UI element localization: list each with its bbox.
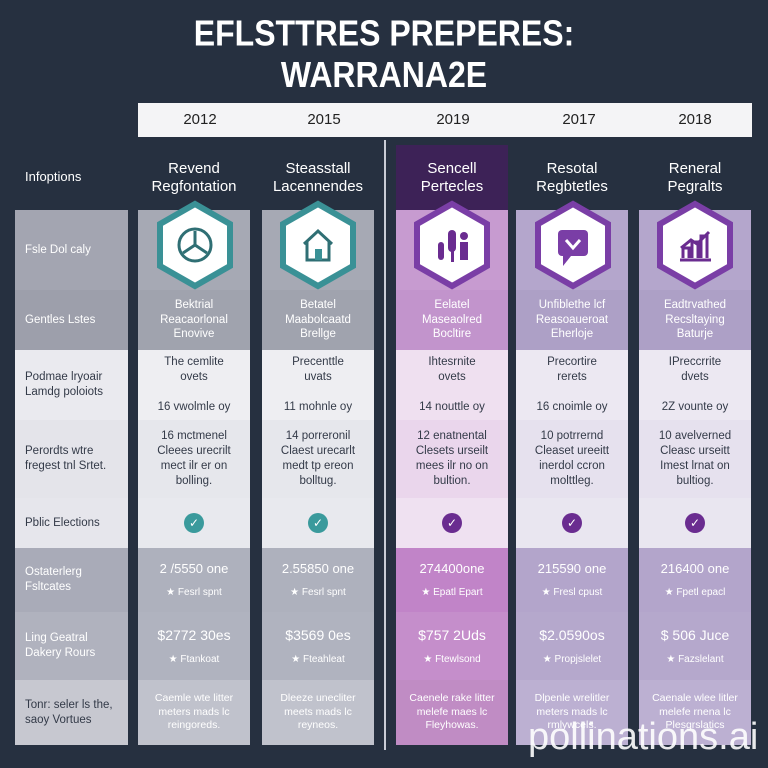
column 2: Steasstall <box>285 160 351 177</box>
column: labels: Tonr: seler ls the, <box>25 699 113 711</box>
column: labels: Fsle Dol caly <box>25 244 91 256</box>
column 2: Dleeze unecliter <box>280 692 356 704</box>
column 5: ✓ <box>690 516 700 530</box>
year header bar: 2015 <box>307 111 341 128</box>
column 2: $3569 0es <box>285 627 351 643</box>
column 1: Regfontation <box>151 178 237 194</box>
column 2: Lacennendes <box>273 178 363 194</box>
column: labels: Podmae lryoair <box>25 371 102 383</box>
column 2: 2.55850 one <box>282 561 354 576</box>
column 3 (highlighted): Pertecles <box>421 178 483 194</box>
column 4: 10 potrrernd <box>541 430 603 442</box>
column 1: Reacaorlonal <box>160 314 228 326</box>
icon: chat hexagon <box>535 200 611 290</box>
column 5: Plesgrslatics <box>666 719 724 731</box>
column 1: Enovive <box>174 328 214 340</box>
column 1: ✓ <box>189 516 199 530</box>
column 3 (highlighted): Fleyhowas. <box>425 719 479 731</box>
column: labels <box>15 169 128 745</box>
column 5 <box>639 160 751 745</box>
column 4: Eherloje <box>551 328 593 340</box>
column 1: ovets <box>180 371 208 383</box>
column: labels: Ling Geatral <box>25 632 88 644</box>
watermark: pollinations.ai <box>528 716 758 758</box>
column 1: 2 /5550 one <box>160 561 228 576</box>
year header bar: 2019 <box>436 111 470 128</box>
column 2: Maabolcaatd <box>285 314 351 326</box>
icon: chart hexagon <box>657 200 733 290</box>
column 3 (highlighted): Bocltire <box>433 328 471 340</box>
column 3 (highlighted): Eelatel <box>434 299 470 311</box>
column 2: uvats <box>304 371 332 383</box>
column 4: ★ Propjslelet <box>543 654 601 665</box>
column 5: Reneral <box>669 160 721 177</box>
column: labels: Dakery Rours <box>25 647 95 659</box>
icon: people hexagon <box>414 200 490 290</box>
column 5: Eadtrvathed <box>664 299 726 311</box>
column: labels: Gentles Lstes <box>25 314 95 326</box>
column 5: ★ Fpetl epacl <box>665 587 725 598</box>
column 4: meters mads lc <box>536 706 608 718</box>
column: labels: Perordts wtre <box>25 445 93 457</box>
column 2: Precenttle <box>292 356 344 368</box>
column 2: reyneos. <box>298 719 338 731</box>
column 1: reingoreds. <box>168 719 220 731</box>
column 4: Resotal <box>547 160 597 177</box>
column 1 <box>138 160 250 745</box>
column 1: Cleees urecrilt <box>157 445 231 457</box>
year header bar: 2017 <box>562 111 596 128</box>
year header bar: 2018 <box>678 111 712 128</box>
column 2: bolltug. <box>299 475 337 487</box>
column 1: 16 mctmenel <box>161 430 227 442</box>
column 3 (highlighted): bultion. <box>433 475 471 487</box>
column 1: $2772 30es <box>157 627 231 643</box>
column 4: ✓ <box>567 516 577 530</box>
column 4: Reasoaueroat <box>536 314 608 326</box>
column 5: ★ Fazslelant <box>666 654 724 665</box>
column 2: 11 mohnle oy <box>284 401 352 413</box>
column 3 (highlighted): ✓ <box>447 516 457 530</box>
column 2: 14 porreronil <box>286 430 350 442</box>
column 4 <box>516 160 628 745</box>
column 3 (highlighted): $757 2Uds <box>418 627 486 643</box>
column 4: Unfiblethe lcf <box>539 299 605 311</box>
column 4: Dlpenle wrelitler <box>535 692 609 704</box>
column 4: Precortire <box>547 356 597 368</box>
title <box>194 13 574 95</box>
column 5: Caenale wlee litler <box>652 692 738 704</box>
column 5: Recsltaying <box>665 314 725 326</box>
column: labels: Lamdg poloiots <box>25 386 103 398</box>
column 5: 216400 one <box>661 561 729 576</box>
column 1: Bektrial <box>175 299 213 311</box>
column 5: Imest lrnat on <box>660 460 730 472</box>
column 1: 16 vwolmle oy <box>158 401 230 413</box>
column 1: ★ Ftankoat <box>169 654 219 665</box>
column 3 (highlighted): Caenele rake litter <box>409 692 495 704</box>
column 3 (highlighted): mees ilr no on <box>416 460 488 472</box>
column 3 (highlighted): melefe maes lc <box>417 706 487 718</box>
column 2: Claest urecarlt <box>281 445 355 457</box>
column 3 (highlighted): ★ Ftewlsond <box>423 654 481 665</box>
icon: house hexagon <box>280 200 356 290</box>
column 1: ★ Fesrl spnt <box>166 587 222 598</box>
column 5: Pegralts <box>667 178 723 194</box>
column 3 (highlighted): Ihtesrnite <box>428 356 476 368</box>
column 5: $ 506 Juce <box>661 627 729 643</box>
column: labels: saoy Vortues <box>25 714 91 726</box>
column 3 (highlighted): ovets <box>438 371 466 383</box>
column 5: 2Z vounte oy <box>662 401 728 413</box>
column 4: Cleaset ureeitt <box>535 445 609 457</box>
column 5: dvets <box>681 371 709 383</box>
column 4: molttleg. <box>550 475 594 487</box>
column 5: bultiog. <box>676 475 714 487</box>
column: labels: Fsltcates <box>25 581 71 593</box>
column 3 (highlighted): Sencell <box>427 160 477 177</box>
column 1: The cemlite <box>164 356 224 368</box>
column 5: Baturje <box>677 328 713 340</box>
column 4: Regbtetles <box>536 178 608 194</box>
column 1: Revend <box>168 160 220 177</box>
column 4: rerets <box>557 371 587 383</box>
column: labels: fregest tnl Srtet. <box>25 460 106 472</box>
column 2: medt tp ereon <box>282 460 353 472</box>
column 2: Betatel <box>300 299 336 311</box>
column 4: 215590 one <box>538 561 606 576</box>
title: EFLSTTRES PREPERES: <box>194 13 574 53</box>
year header bar <box>138 103 752 137</box>
column 1: bolling. <box>176 475 212 487</box>
column 4: rmlywcels. <box>547 719 596 731</box>
title: WARRANA2E <box>281 54 487 95</box>
column 5: 10 avelverned <box>659 430 731 442</box>
year header bar: 2012 <box>183 111 217 128</box>
column 5: Cleasc urseitt <box>660 445 730 457</box>
icon: clock hexagon <box>157 200 233 290</box>
column: labels: Pblic Elections <box>25 517 100 529</box>
column 3 (highlighted): Clesets urseilt <box>416 445 488 457</box>
column 2: meets mads lc <box>284 706 352 718</box>
column 4: 16 cnoimle oy <box>537 401 607 413</box>
column 1: mect ilr er on <box>161 460 227 472</box>
column 3 (highlighted): Maseaolred <box>422 314 482 326</box>
column 2: ★ Fesrl spnt <box>290 587 346 598</box>
column 2: ✓ <box>313 516 323 530</box>
column 3 (highlighted) <box>396 145 508 745</box>
column 4: $2.0590os <box>539 627 605 643</box>
column 4: ★ Fresl cpust <box>542 587 602 598</box>
column 5: IPreccrrite <box>669 356 721 368</box>
column 3 (highlighted): 14 nouttle oy <box>419 401 485 413</box>
column 2: ★ Fteahleat <box>291 654 345 665</box>
column 3 (highlighted): 274400one <box>419 561 485 576</box>
column 1: meters mads lc <box>158 706 230 718</box>
column 3 (highlighted): 12 enatnental <box>417 430 487 442</box>
column: labels: Infoptions <box>25 169 81 184</box>
column 1: Caemle wte litter <box>155 692 233 704</box>
column 3 (highlighted): ★ Epatl Epart <box>421 587 483 598</box>
column 4: inerdol ccron <box>539 460 605 472</box>
column 2 <box>262 160 374 745</box>
divider <box>384 140 386 750</box>
column 5: melefe rnena lc <box>659 706 731 718</box>
column 2: Brellge <box>300 328 336 340</box>
column: labels: Ostaterlerg <box>25 566 82 578</box>
